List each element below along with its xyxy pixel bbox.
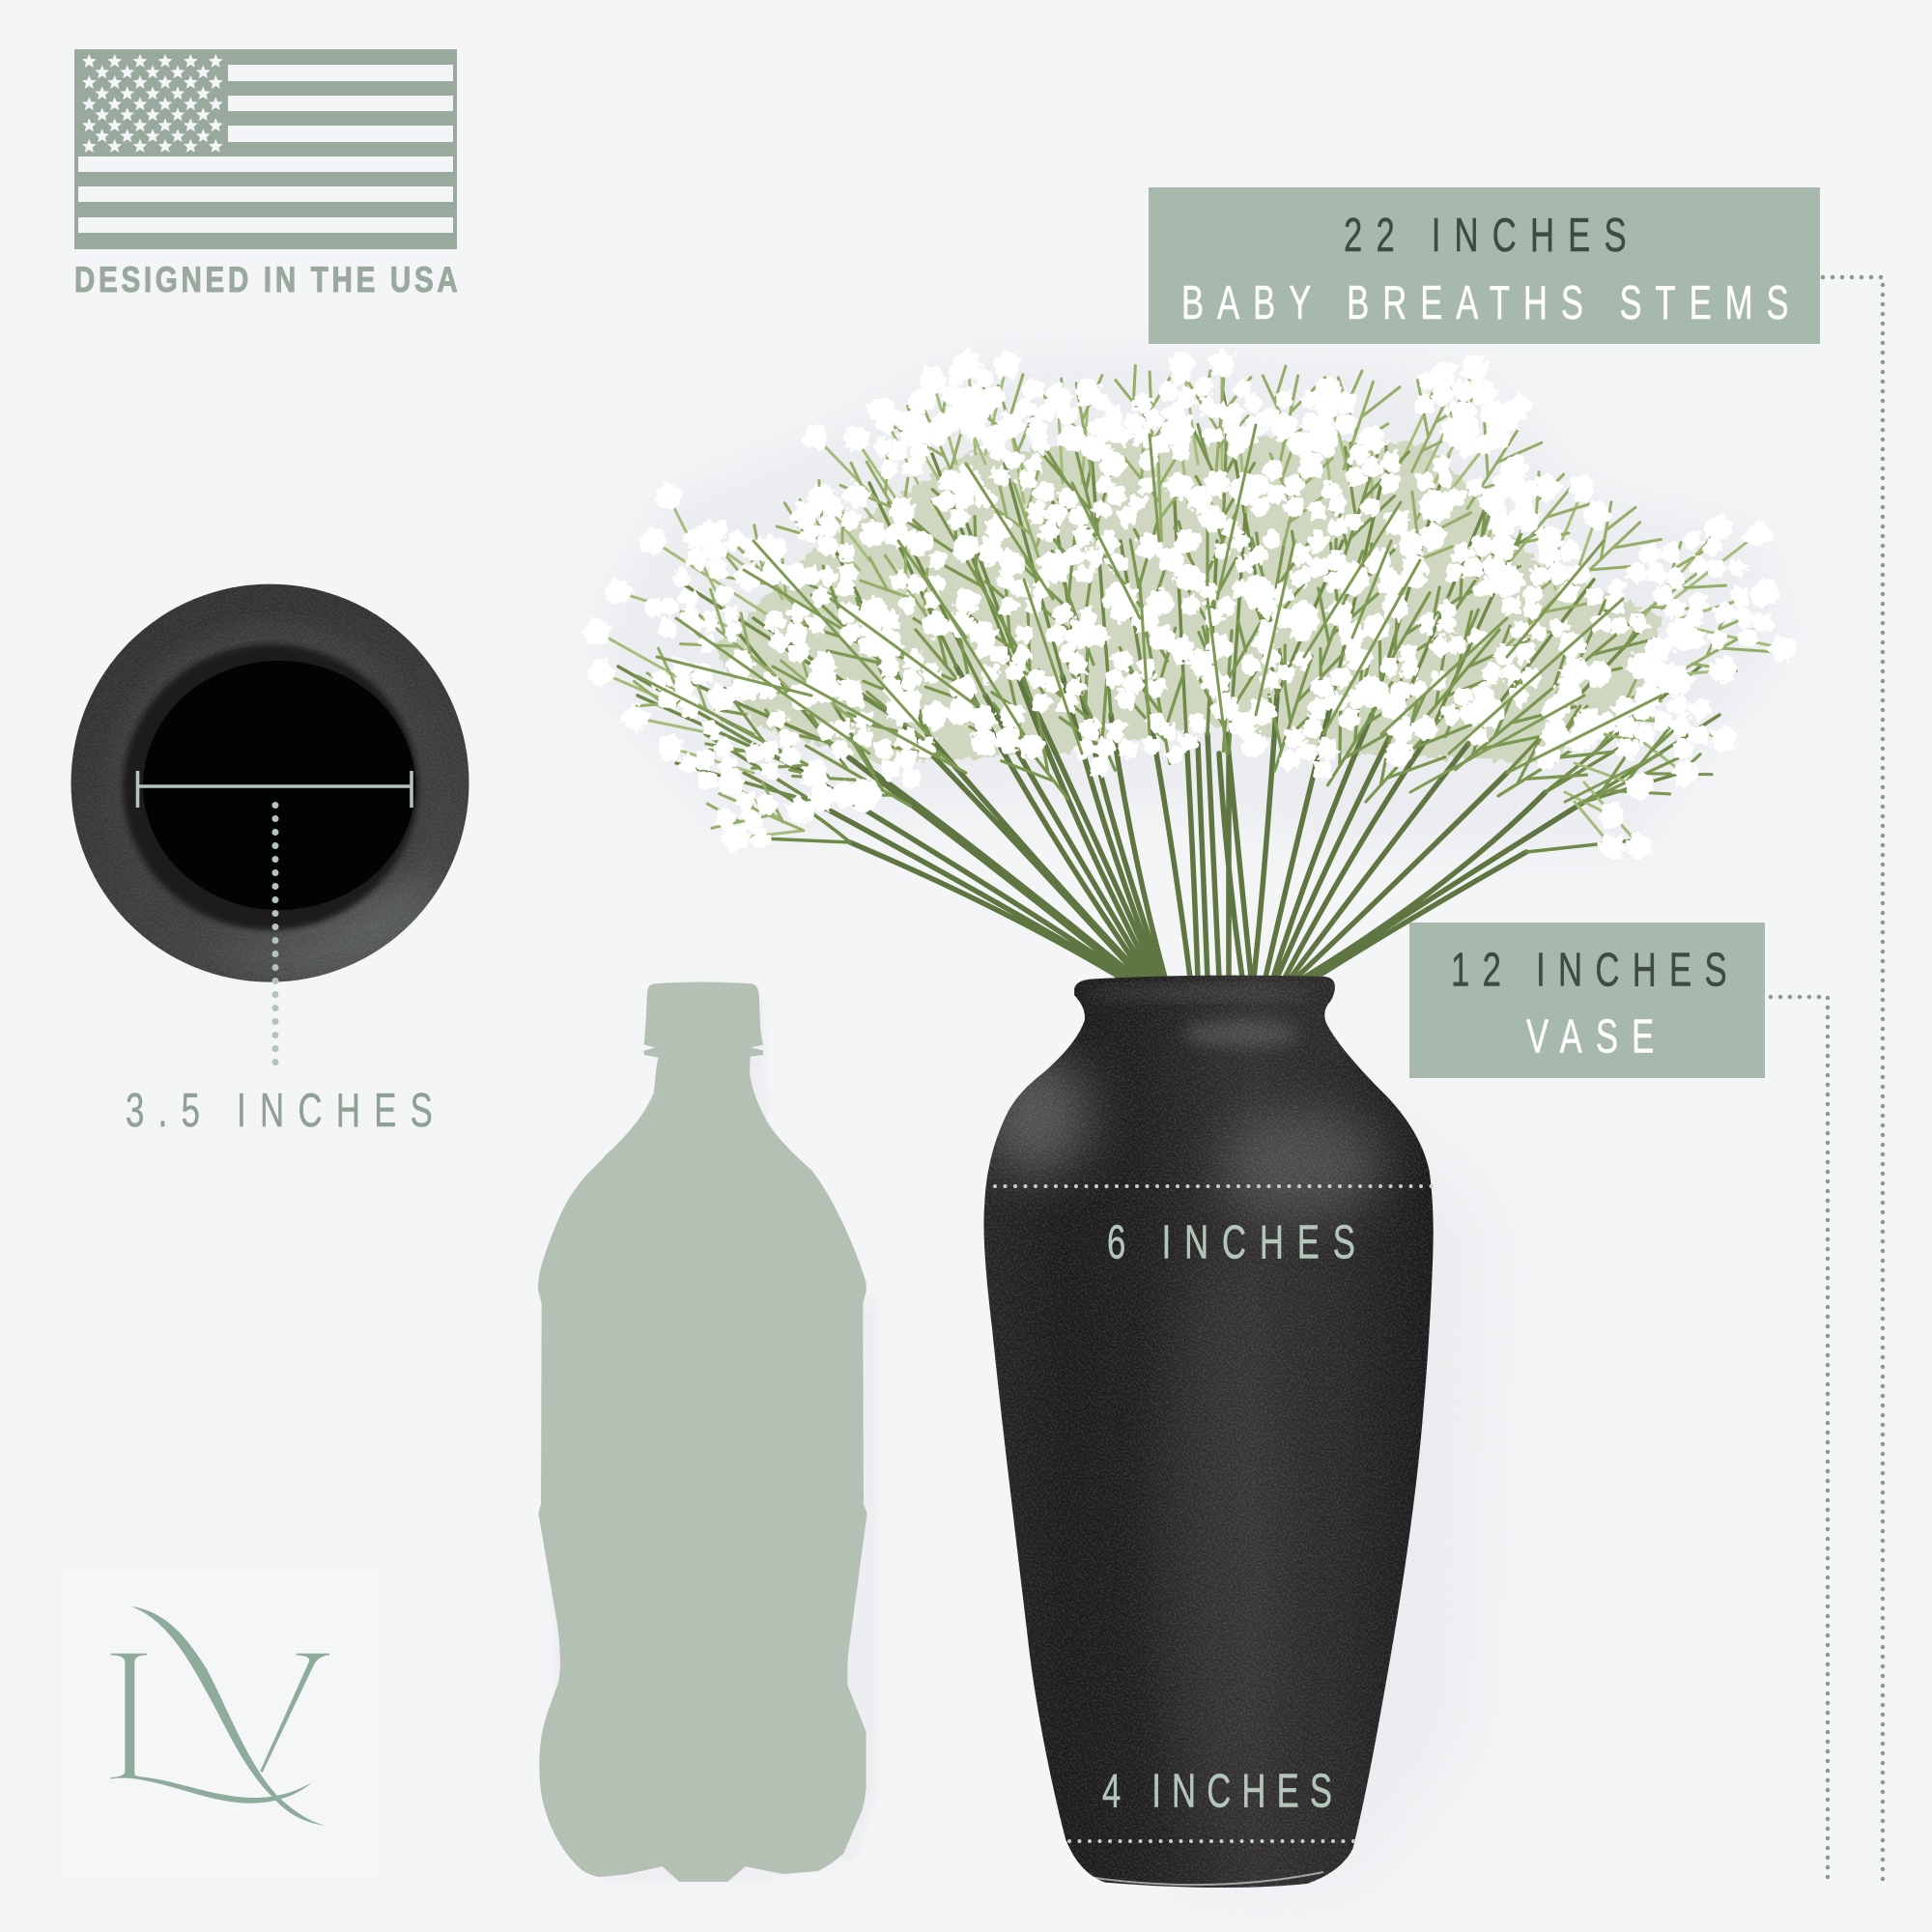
mid branches bbox=[618, 386, 1719, 852]
width line: 6 inches bbox=[995, 1184, 1432, 1188]
dotted connector: stems height bbox=[1823, 277, 1883, 1884]
label: 4 inches: 4 INCHES bbox=[1102, 1764, 1332, 1818]
vase opening top view bbox=[68, 580, 473, 1138]
width line: 4 inches bbox=[1069, 1839, 1354, 1843]
inner opening bbox=[143, 661, 415, 910]
vase soft shadow bbox=[1159, 1063, 1488, 1884]
logo backing bbox=[60, 1570, 377, 1879]
dark vase bbox=[983, 976, 1438, 1888]
dense blossom clumps bbox=[821, 429, 1681, 795]
baby's breath bouquet bbox=[597, 355, 1787, 978]
callout: 22 inches baby breaths stems: 22 INCHES bbox=[1344, 209, 1627, 263]
designed in the usa text: DESIGNED IN THE USA bbox=[74, 261, 458, 300]
dotted leader bbox=[272, 806, 278, 1063]
bouquet soft shadow bbox=[599, 355, 1787, 850]
measure bar bbox=[137, 771, 412, 808]
vase body bbox=[983, 976, 1434, 1888]
lv logo bbox=[60, 1570, 377, 1879]
label: 6 inches: 6 INCHES bbox=[1107, 1215, 1355, 1269]
main stems bbox=[787, 667, 1584, 978]
green branches over blossoms bbox=[638, 425, 1662, 802]
bottle soft shadow bbox=[553, 995, 878, 1883]
light upper branches bbox=[597, 363, 1782, 847]
inner wall bbox=[123, 644, 418, 930]
flag badge bbox=[74, 49, 458, 300]
white blossom clusters bbox=[597, 363, 1782, 847]
callout: 12 inches vase: 12 INCHES bbox=[1451, 943, 1727, 997]
bouquet foliage underlay bbox=[715, 435, 1662, 763]
icon: american flag bbox=[74, 49, 457, 249]
callout: 22 inches baby breaths stems: BABY BREATHS STEMS bbox=[1181, 276, 1789, 330]
outer rim bbox=[71, 584, 469, 982]
callout: 12 inches vase: VASE bbox=[1526, 1009, 1654, 1064]
callout: 12 inches vase bbox=[1409, 923, 1765, 1078]
callout: 22 inches baby breaths stems bbox=[1149, 187, 1820, 344]
dotted connector: vase height bbox=[1771, 997, 1828, 1884]
logo monogram bbox=[111, 1606, 329, 1826]
vase highlights and texture bbox=[976, 966, 1449, 1893]
bottle bbox=[538, 982, 867, 1882]
forked twigs bbox=[624, 361, 1775, 858]
outer blossom tips bbox=[597, 363, 1782, 847]
rim shading bbox=[68, 580, 473, 985]
label: 3.5 inches: 3.5 INCHES bbox=[126, 1084, 433, 1138]
